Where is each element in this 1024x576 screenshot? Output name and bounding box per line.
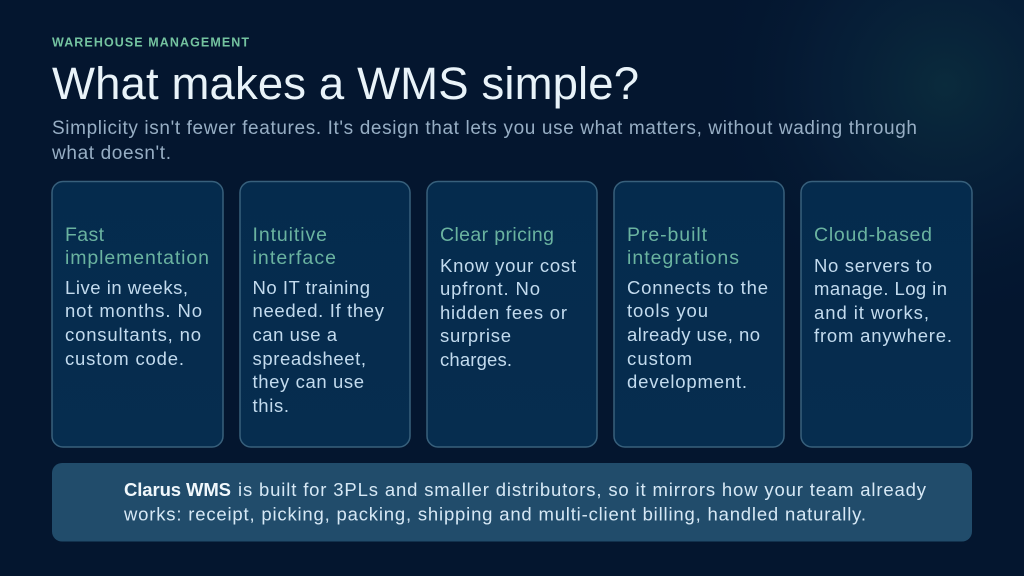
card text: [65, 277, 202, 369]
panel: fast implementation: [52, 182, 223, 447]
card text: [252, 277, 385, 416]
card text: tools you: [627, 300, 708, 321]
card heading: Fast: [65, 224, 105, 246]
card text: [627, 277, 768, 392]
card heading: Pre-built: [627, 224, 708, 246]
card text: custom: [627, 348, 692, 369]
callout text: Clarus WMS: [124, 479, 231, 500]
callout text: [123, 479, 927, 524]
panel: clear pricing: [427, 182, 597, 447]
card heading: Intuitive: [252, 224, 327, 246]
card text: development.: [627, 371, 747, 392]
card text: [440, 255, 576, 370]
card heading: Clear pricing: [440, 224, 554, 246]
card text: needed. If they: [252, 300, 385, 321]
subtitle: [51, 118, 917, 164]
card heading: [65, 224, 209, 269]
callout text: is built for 3PLs and smaller distributors, so it mirrors how your team already: [238, 479, 927, 500]
panel: cloud-based: [801, 182, 972, 447]
card text: and it works,: [814, 302, 929, 323]
subtitle: what doesn't.: [51, 143, 171, 164]
card text: this.: [252, 395, 289, 416]
card text: charges.: [440, 349, 512, 370]
subtitle: Simplicity isn't fewer features. It's design that lets you use what matters, without wading through: [52, 118, 917, 139]
card text: not months. No: [65, 300, 202, 321]
card heading: integrations: [627, 247, 739, 269]
callout: clarus wms: [52, 463, 972, 542]
card text: upfront. No: [440, 278, 540, 299]
card heading: interface: [252, 247, 336, 269]
card heading: [252, 224, 336, 269]
card text: they can use: [252, 371, 364, 392]
card text: Know your cost: [440, 255, 576, 276]
card text: Live in weeks,: [65, 277, 188, 298]
card text: spreadsheet,: [252, 348, 366, 369]
card text: surprise: [440, 325, 511, 346]
card text: can use a: [252, 324, 338, 345]
card text: from anywhere.: [814, 325, 952, 346]
card text: [814, 255, 952, 346]
card heading: implementation: [65, 247, 209, 269]
card text: manage. Log in: [814, 278, 947, 299]
title: What makes a WMS simple?: [52, 58, 639, 109]
card text: already use, no: [627, 324, 760, 345]
card text: Connects to the: [627, 277, 768, 298]
card text: No servers to: [814, 255, 932, 276]
eyebrow: warehouse management: WAREHOUSE MANAGEMENT: [52, 36, 249, 50]
card text: custom code.: [65, 348, 184, 369]
card heading: Cloud-based: [814, 224, 932, 246]
card text: No IT training: [252, 277, 370, 298]
panel: pre-built integrations: [614, 182, 784, 447]
callout text: works: receipt, picking, packing, shipping and multi-client billing, handled naturally.: [123, 504, 866, 524]
panel: intuitive interface: [240, 182, 410, 447]
card heading: [627, 224, 739, 269]
card text: consultants, no: [65, 324, 201, 345]
card text: hidden fees or: [440, 302, 567, 323]
